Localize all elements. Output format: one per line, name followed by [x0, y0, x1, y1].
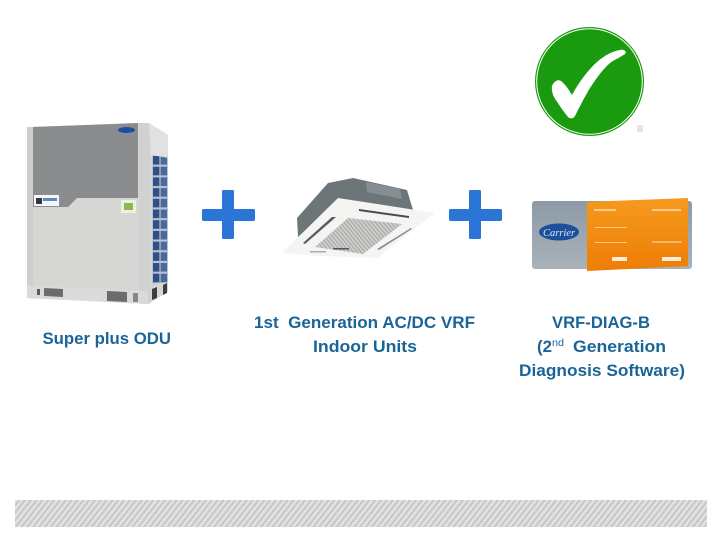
label: indoor units: 1st Generation AC/DC VRF: [254, 314, 475, 332]
label: indoor units: Indoor Units: [313, 338, 417, 356]
icon: plus sign two: [449, 190, 502, 239]
label: diagnosis software: Diagnosis Software): [519, 362, 685, 380]
label: diagnosis software: [519, 314, 685, 380]
image: outdoor unit: [27, 123, 168, 304]
icon: plus sign one: [202, 190, 255, 239]
green label: [121, 200, 136, 213]
footer: hatched bar: [15, 500, 707, 527]
Carrier logo: [118, 127, 135, 133]
gray front panel: [33, 123, 138, 207]
Carrier oval logo: Carrier: [543, 228, 576, 239]
label: diagnosis software: (2: [537, 338, 552, 356]
label: diagnosis software: nd: [552, 337, 564, 349]
front grille: [315, 218, 402, 254]
icon: green check mark: [535, 27, 644, 136]
form details: [594, 209, 616, 211]
image: cassette indoor unit: [282, 178, 435, 258]
label: Super plus ODU: Super plus ODU: [42, 330, 171, 348]
base vents: [27, 285, 148, 304]
image: diagnosis software: [532, 198, 692, 271]
Xpower badge: [34, 195, 59, 206]
label: diagnosis software: Generation: [573, 338, 666, 356]
label: indoor units: [254, 314, 475, 356]
Carrier oval logo: [539, 224, 579, 240]
blue condenser coil: [152, 155, 168, 284]
label: diagnosis software: VRF-DIAG-B: [552, 314, 650, 332]
louvres: [359, 209, 409, 218]
